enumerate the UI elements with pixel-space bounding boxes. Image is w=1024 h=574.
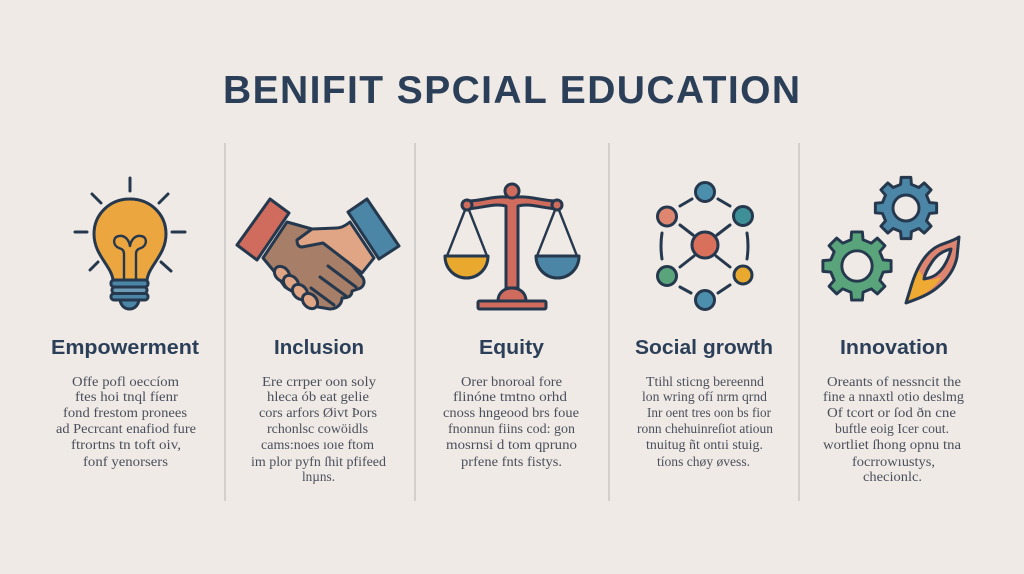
body text: equity <box>443 375 579 470</box>
body text: innovation: Oreants of nessncit the <box>827 375 961 390</box>
panel: social growth <box>635 182 773 470</box>
body text: social growth: ronn chehuinreſiot atioun <box>637 422 773 437</box>
body text: inclusion: Ere crrper oon soly <box>262 375 376 390</box>
icon: leaf <box>906 237 959 303</box>
body text: inclusion: rchonlsc cowöidls <box>267 422 368 437</box>
body text: social growth: tnuitug ñt ontıi stuig. <box>646 438 763 453</box>
panel: equity <box>443 184 579 470</box>
icon: balance scale <box>445 184 579 309</box>
body text: innovation: buftle eoig Icer cout. <box>835 422 949 437</box>
body text: inclusion <box>251 375 386 485</box>
body text: innovation: focrrowıustys, <box>852 455 935 470</box>
body text: inclusion: lnµns. <box>302 470 335 485</box>
body text: equity: cnoss hngeood brs foue <box>443 406 579 421</box>
body text: equity: flinóne tmtno orhd <box>453 390 567 405</box>
body text: equity: Orer bnoroal fore <box>461 375 562 390</box>
body text: innovation: fine a nnaxtl otio deslmg <box>823 390 964 405</box>
body text: inclusion: hleca ób eat gelie <box>267 390 369 405</box>
icon: green gear <box>823 232 891 300</box>
panel: inclusion <box>237 199 399 485</box>
heading: inclusion: Inclusion <box>274 337 364 359</box>
title: BENIFIT SPCIAL EDUCATION <box>223 69 800 112</box>
body text: social growth: Ttihl sticng bereennd <box>646 375 764 390</box>
heading: social growth: Social growth <box>635 337 773 359</box>
body text: innovation: wortliet ſhong opnu tna <box>823 438 962 453</box>
body text: innovation: Of tcort or ſod ðn cne <box>827 406 956 421</box>
body text: empowerment <box>56 375 196 470</box>
panel: empowerment <box>51 178 199 470</box>
body text: equity: fnonnun fiins cod: gon <box>448 422 575 437</box>
body text: equity: prfene fnts fistys. <box>461 455 562 470</box>
heading: equity: Equity <box>479 337 545 359</box>
body text: social growth: tíons chøy øvess. <box>657 455 750 470</box>
heading: empowerment: Empowerment <box>51 337 199 359</box>
panel: innovation <box>823 177 964 485</box>
body text: empowerment: ftes hoi tnql fíenr <box>75 390 178 405</box>
body text: empowerment: fond frestom pronees <box>63 406 187 421</box>
body text: equity: mosrnsi d tom qpruno <box>446 438 577 453</box>
icon: light bulb <box>75 178 185 309</box>
body text: innovation: checionlc. <box>863 470 922 485</box>
body text: social growth: lon wring ofí nrm qrnd <box>642 390 767 405</box>
body text: inclusion: cams:noes ıoıe ftom <box>261 438 374 453</box>
icon: blue gear <box>875 177 937 239</box>
body text: innovation <box>823 375 964 485</box>
body text: empowerment: Offe pofl oeccíom <box>72 375 179 390</box>
body text: empowerment: ftrortns tn toft oiv, <box>71 438 181 453</box>
body text: social growth <box>637 375 773 470</box>
body text: empowerment: fonf yenorsers <box>83 455 168 470</box>
heading: innovation: Innovation <box>840 337 948 359</box>
body text: inclusion: cors arfors Øivt Þors <box>259 406 377 421</box>
icon: network <box>658 182 752 310</box>
icon: gears and leaf <box>823 177 959 303</box>
body text: social growth: Inr oent tres oon bs fior <box>647 406 771 421</box>
body text: inclusion: im plor pyfn ſhit pfifeed <box>251 455 386 470</box>
icon: handshake <box>237 199 399 312</box>
body text: empowerment: ad Pecrcant enafiod fure <box>56 422 196 437</box>
